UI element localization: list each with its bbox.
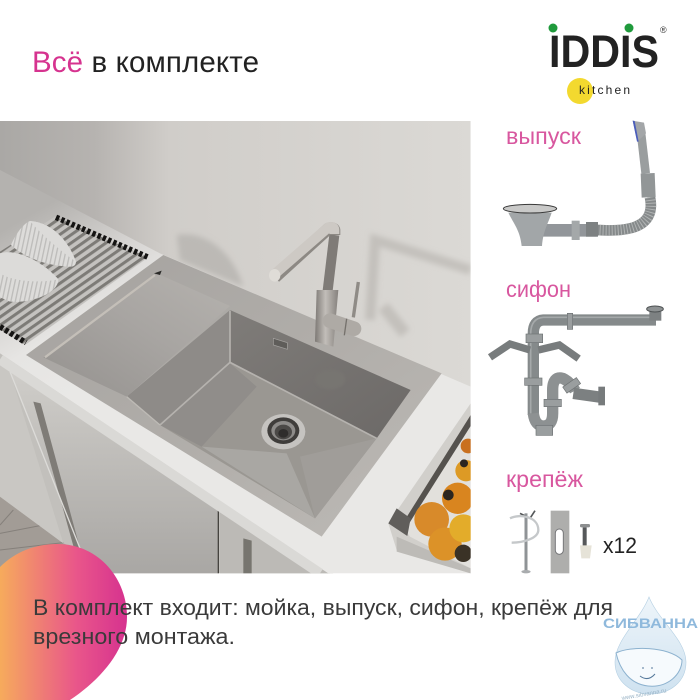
horizontal pipe bbox=[542, 211, 597, 249]
counter front edge bbox=[0, 359, 320, 573]
drain outlet hose bbox=[503, 121, 651, 246]
drying rack bbox=[0, 217, 148, 345]
trap outlet bbox=[573, 393, 602, 397]
strainer body bbox=[508, 213, 552, 246]
gradient blob bbox=[0, 544, 127, 700]
persimmons bbox=[414, 439, 477, 562]
trap bbox=[533, 378, 575, 426]
sink top plate bbox=[26, 255, 442, 537]
overflow head bbox=[633, 121, 646, 142]
description line one: В комплект входит: мойка, выпуск, сифон, крепёж для bbox=[33, 595, 613, 620]
clamp screw bbox=[510, 511, 538, 573]
logo green dots bbox=[548, 24, 634, 32]
hose ribs bbox=[597, 197, 651, 230]
watermark: Сибванна bbox=[603, 597, 698, 700]
outlet cap bbox=[647, 306, 663, 312]
outlet elbow bbox=[637, 312, 673, 321]
clamp bolt bbox=[580, 524, 592, 558]
right hose connector bbox=[538, 345, 579, 359]
cabinet base bbox=[0, 353, 333, 573]
countertop bbox=[0, 170, 471, 573]
fruit drawer bbox=[388, 403, 471, 573]
quantity label: x12 bbox=[603, 533, 637, 558]
logo: IDDIS kitchen bbox=[548, 24, 667, 104]
strainer flange bbox=[503, 204, 557, 213]
pipe highlight bbox=[531, 317, 656, 413]
bowl lower bbox=[0, 252, 58, 302]
title: Всё в комплекте bbox=[32, 46, 259, 79]
watermark face bbox=[640, 667, 655, 679]
watermark bath bbox=[616, 648, 682, 686]
drainboard bbox=[44, 270, 163, 396]
description line two: врезного монтажа. bbox=[33, 624, 235, 649]
mounting hardware bbox=[510, 511, 592, 573]
photo: kitchen sink bbox=[0, 120, 477, 573]
overflow tube bbox=[648, 173, 649, 197]
siphon bbox=[490, 306, 663, 435]
label: выпуск: выпуск bbox=[506, 123, 582, 149]
label: крепёж: крепёж bbox=[506, 466, 584, 492]
centre cabinet door bbox=[10, 372, 218, 573]
pipe sleeve bbox=[586, 222, 598, 237]
faucet bbox=[269, 227, 358, 347]
watermark name: СИБВАННА bbox=[603, 616, 698, 631]
faucet and bowl shadows on wall bbox=[177, 234, 471, 333]
overflow upper tube bbox=[641, 130, 646, 173]
watermark drop bbox=[615, 597, 686, 694]
overflow blue gasket bbox=[633, 121, 639, 142]
right cabinet door bbox=[218, 503, 330, 573]
sink bowl bbox=[127, 310, 411, 518]
clamp plate bbox=[551, 511, 569, 573]
top pipe and riser bbox=[533, 320, 656, 415]
corrugated hose bbox=[597, 197, 651, 230]
left hose connector bbox=[490, 344, 530, 357]
description text bbox=[33, 595, 613, 649]
logo yellow spot bbox=[567, 78, 593, 104]
logo wordmark: IDDIS bbox=[549, 26, 659, 77]
wall bbox=[0, 121, 470, 386]
label: сифон: сифон bbox=[506, 276, 571, 302]
collars bbox=[525, 313, 581, 435]
trap collar bbox=[598, 387, 605, 405]
logo kitchen word: kitchen bbox=[579, 83, 630, 97]
floor bbox=[0, 497, 66, 567]
drain strainer bbox=[261, 414, 305, 449]
registered mark: ® bbox=[660, 25, 667, 35]
pipe nut bbox=[572, 221, 580, 240]
bowl upper bbox=[11, 221, 76, 267]
left cabinet door bbox=[0, 496, 64, 543]
